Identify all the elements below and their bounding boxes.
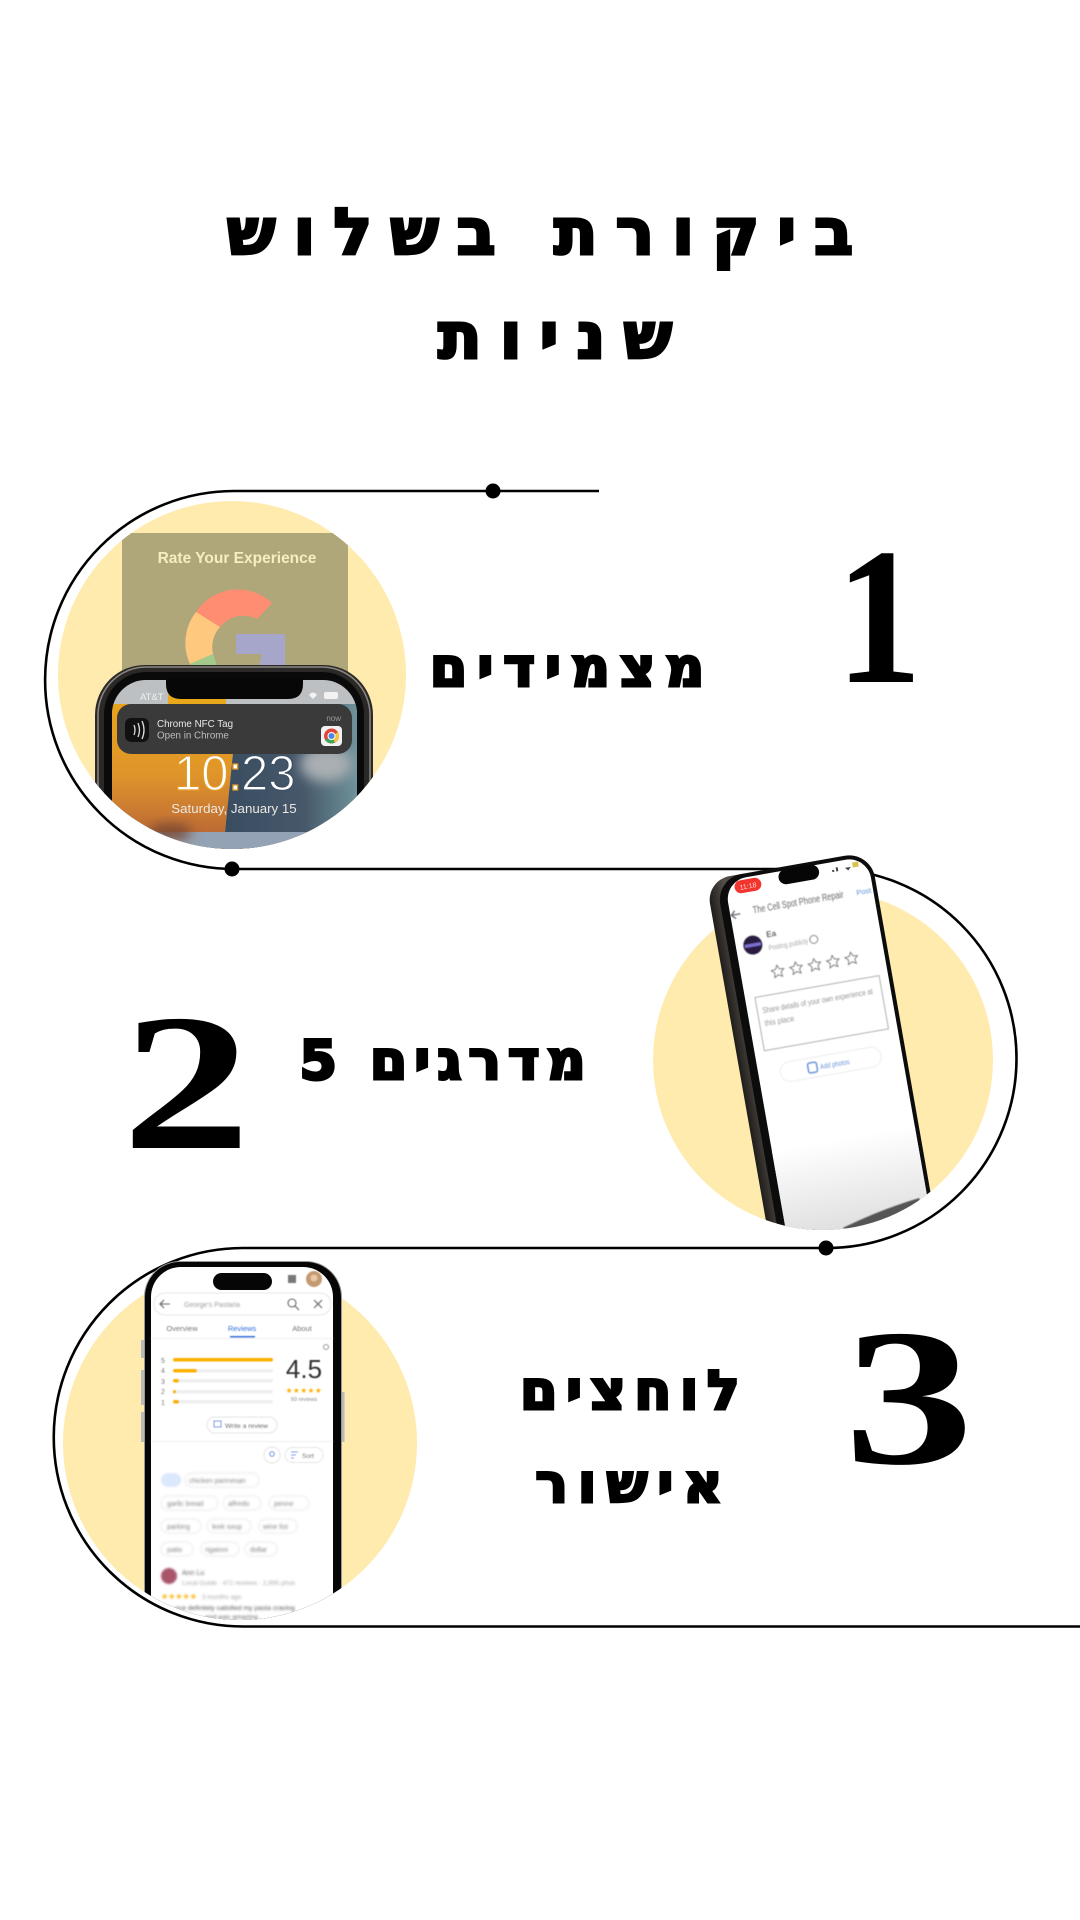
review topic chips: patio xyxy=(167,1547,182,1554)
notification: Chrome NFC Tag xyxy=(157,719,233,730)
first review: 3 months ago xyxy=(202,1594,242,1601)
search and sort buttons xyxy=(264,1447,280,1463)
rating bars: 5 xyxy=(161,1358,165,1365)
connector line: step 3 xyxy=(54,1248,1080,1626)
title xyxy=(227,196,871,374)
tilted phone with review form: Post xyxy=(856,886,873,897)
write a review button xyxy=(207,1417,277,1433)
notification: now xyxy=(326,714,341,723)
first review: Ann Lu xyxy=(182,1570,204,1577)
first review: Local Guide · 471 reviews · 2,995 photos xyxy=(182,1580,301,1587)
step 3 number: 3 xyxy=(844,1290,974,1505)
step 3 label: אישור xyxy=(535,1452,733,1515)
rating bars: 3 xyxy=(161,1379,165,1386)
lock screen wallpaper xyxy=(112,680,357,862)
back arrow xyxy=(731,910,741,919)
clock xyxy=(177,756,294,791)
yellow circle 3 xyxy=(63,1266,417,1620)
clock: 10: xyxy=(174,747,242,801)
tilted phone with review form xyxy=(710,855,930,1230)
panel: step 2 image xyxy=(653,855,993,1230)
phone with review summary: ★★★★★ xyxy=(286,1386,322,1395)
form title: The Cell Spot Phone Repair xyxy=(752,890,845,916)
review topic chips: garlic bread xyxy=(167,1501,204,1508)
step 1 label: מצמידים xyxy=(430,636,714,699)
rating bars: 2 xyxy=(161,1389,165,1396)
rating bars: 4 xyxy=(161,1368,165,1375)
first review: nce definitely satisfied my pasta craving xyxy=(175,1605,295,1612)
status chip xyxy=(734,878,762,894)
notification: Open in Chrome xyxy=(157,730,229,742)
step 2 number: 2 xyxy=(122,975,251,1191)
review topic chips: penne xyxy=(274,1501,294,1508)
title: ביקורת בשלוש xyxy=(227,196,871,270)
title: שניות xyxy=(438,300,690,374)
average rating: 4.5 xyxy=(286,1354,322,1384)
connector line: step 2 xyxy=(232,869,1016,1256)
tilted phone with review form: Share details of your own experience at xyxy=(762,987,874,1015)
phone body xyxy=(95,665,373,849)
step 1 number: 1 xyxy=(836,508,922,724)
yellow circle 2 xyxy=(653,890,993,1230)
step 3 label: לוחצים xyxy=(520,1359,748,1422)
app grid and avatar xyxy=(288,1271,322,1287)
connector line: step 1 xyxy=(45,484,599,876)
dynamic island xyxy=(213,1273,272,1290)
panel: step 1 image xyxy=(58,501,406,849)
phone with NFC notification xyxy=(95,533,373,849)
review topic chips: dollar xyxy=(250,1547,268,1554)
phone with review summary: Write a review xyxy=(225,1423,268,1430)
review card xyxy=(122,533,348,683)
phone with review summary xyxy=(141,1261,344,1620)
date: Saturday, January 15 xyxy=(171,801,297,816)
phone with review summary: Reviews xyxy=(228,1324,256,1333)
add photos button xyxy=(779,1046,883,1083)
review topic chips: parking xyxy=(167,1524,190,1531)
tilted phone with review form: Add photos xyxy=(819,1057,851,1071)
step 3 label xyxy=(520,1359,748,1515)
review topic chips: rigatoni xyxy=(205,1547,228,1554)
rating bars xyxy=(161,1358,273,1407)
review text box xyxy=(755,976,888,1051)
tabs: Overview xyxy=(166,1324,198,1333)
search pill xyxy=(154,1293,331,1315)
rating bars: 1 xyxy=(161,1400,165,1407)
phone with review summary: 50 reviews xyxy=(291,1397,317,1403)
phone screen xyxy=(728,859,927,1230)
phone with review summary: About xyxy=(292,1324,313,1333)
first review xyxy=(160,1566,296,1620)
tilted phone with review form: Ea xyxy=(766,929,777,940)
step 2 label: מדרגים 5 xyxy=(299,1029,593,1092)
review topic chips: leek soup xyxy=(212,1524,242,1531)
phone with review summary: George's Pastaria xyxy=(184,1300,241,1309)
review topic chips xyxy=(161,1473,309,1556)
notification xyxy=(117,704,352,754)
first review: and was amazing xyxy=(205,1614,258,1621)
empty rating stars xyxy=(771,951,859,978)
first review: ★★★★★ xyxy=(161,1592,197,1601)
panel: step 3 image xyxy=(63,1261,417,1620)
phone with review summary: Sort xyxy=(302,1453,314,1460)
phone screen xyxy=(151,1267,333,1620)
tilted phone with review form: this place xyxy=(764,1014,795,1028)
review card: Rate Your Experience xyxy=(158,550,317,567)
review topic chips: chicken parmesan xyxy=(189,1478,246,1485)
tilted phone with review form: Posting publicly xyxy=(768,938,809,952)
clock: 23 xyxy=(241,747,296,801)
yellow circle 1 xyxy=(58,501,406,849)
dynamic island xyxy=(778,865,820,884)
notch xyxy=(166,678,303,699)
avatar xyxy=(742,934,764,956)
review topic chips: wine list xyxy=(262,1524,288,1531)
review topic chips: alfredo xyxy=(228,1501,250,1508)
status bar: AT&T xyxy=(140,692,164,703)
tilted phone with review form: 11:18 xyxy=(739,882,757,892)
